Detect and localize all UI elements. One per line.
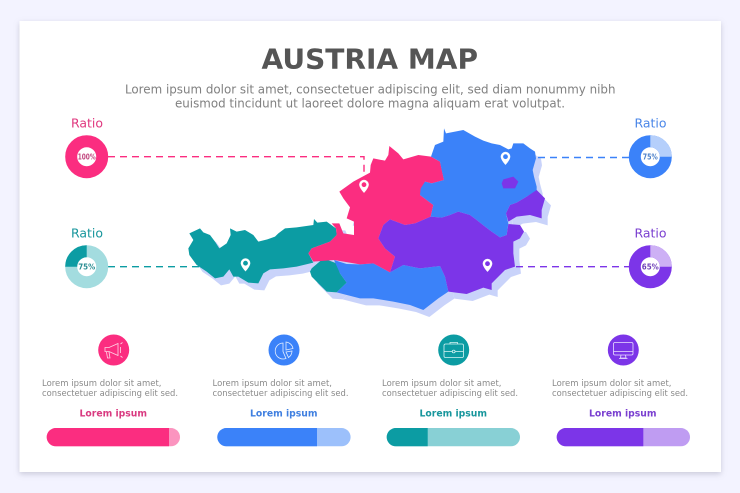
value: 75% (643, 153, 658, 162)
heading: Lorem ipsum (420, 408, 487, 420)
column: purple (552, 334, 690, 446)
ratio: teal 75% (71, 226, 103, 282)
region: Styria purple (378, 212, 524, 294)
region: Lower Austria blue (420, 128, 537, 237)
donut light segment (650, 141, 666, 157)
pin: pink region (359, 180, 369, 193)
ratio: pink 100% (71, 116, 103, 172)
column: pink (42, 334, 180, 446)
label: Ratio (71, 226, 103, 240)
region: Tyrol west teal (188, 219, 337, 283)
ratio: blue 75% (634, 116, 666, 172)
description: consectetuer adipiscing elit sed. (382, 389, 518, 399)
description: consectetuer adipiscing elit sed. (552, 389, 688, 399)
region: Salzburg and Upper Austria pink (308, 146, 444, 272)
description: Lorem ipsum dolor sit amet, (42, 379, 162, 389)
description: Lorem ipsum dolor sit amet, (552, 379, 672, 389)
ratio: purple 65% (634, 226, 666, 282)
connector: blue dashed line (538, 156, 629, 158)
donut (71, 141, 102, 172)
description (382, 379, 518, 399)
subtitle text: euismod tincidunt ut laoreet dolore magna aliquam erat volutpat. (175, 96, 565, 110)
label: Ratio (634, 116, 666, 130)
label: Ratio (634, 226, 666, 240)
donut (635, 251, 666, 282)
pin: purple region (483, 259, 492, 272)
description: Lorem ipsum dolor sit amet, (212, 379, 332, 389)
region: Carinthia west teal (310, 258, 347, 292)
progress bar (47, 428, 180, 446)
heading: Lorem ipsum (589, 408, 656, 420)
description (552, 379, 688, 399)
title: AUSTRIA MAP (262, 42, 478, 75)
donut (71, 251, 102, 282)
label: Ratio (71, 116, 103, 130)
value: 75% (78, 263, 95, 272)
donut light segment (650, 251, 666, 267)
progress bar (387, 428, 520, 446)
heading: Lorem ipsum (80, 408, 147, 420)
pin: purple hole (485, 261, 490, 266)
connector: pink dashed line (108, 157, 364, 177)
connector: teal dashed line (108, 266, 200, 268)
value: 65% (642, 263, 659, 272)
region: Vienna purple (502, 177, 518, 188)
pin: blue hole (503, 154, 508, 159)
pin: teal hole (243, 261, 248, 266)
region: Carinthia blue (334, 260, 448, 310)
subtitle text (125, 82, 616, 110)
description (42, 379, 178, 399)
icon: megaphone (98, 334, 129, 366)
pin: pink hole (362, 182, 366, 187)
description: consectetuer adipiscing elit sed. (212, 389, 348, 399)
description: Lorem ipsum dolor sit amet, (382, 379, 502, 389)
value: 100% (78, 152, 96, 162)
subtitle text: Lorem ipsum dolor sit amet, consectetuer adipiscing elit, sed diam nonummy nibh (125, 82, 616, 96)
map of Austria (188, 128, 545, 310)
donut dark segment (71, 251, 87, 267)
column: blue (212, 334, 351, 446)
region: Burgenland purple (506, 190, 545, 222)
icon: pie chart (268, 334, 300, 366)
icon: monitor (608, 334, 639, 366)
heading: Lorem ipsum (250, 408, 318, 420)
description: consectetuer adipiscing elit sed. (42, 389, 178, 399)
progress bar (557, 428, 690, 446)
pin: blue region (501, 152, 510, 165)
connector: purple dashed line (516, 266, 629, 268)
pin: teal region (241, 258, 250, 271)
donut (635, 141, 666, 172)
description (212, 379, 348, 399)
icon: briefcase (438, 334, 469, 366)
column: teal (382, 334, 520, 446)
progress bar (217, 428, 351, 446)
